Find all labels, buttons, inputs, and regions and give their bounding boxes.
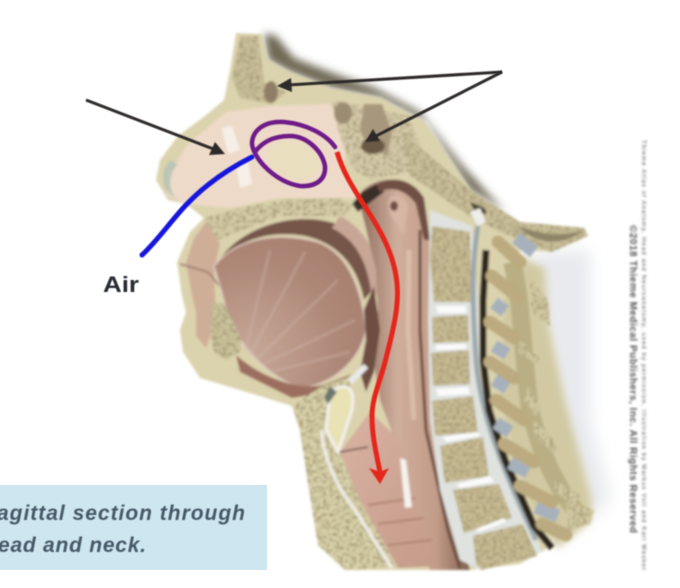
- roof of mouth dark band: [218, 219, 376, 300]
- skull shadow: [264, 33, 520, 222]
- nose cartilage: [163, 160, 178, 198]
- conchae highlight: [263, 134, 325, 186]
- nasal cavity: [162, 104, 360, 208]
- floor of mouth muscle: [236, 355, 352, 398]
- tongue: [214, 237, 366, 388]
- purple path: airflow loop in nasal cavity: [252, 122, 335, 186]
- posterior tissue: [490, 240, 592, 548]
- mandible: [210, 302, 241, 360]
- arrow: nasal cavity pointer: [86, 100, 225, 155]
- caption box: [0, 485, 267, 570]
- sinus pocket lower: [360, 104, 392, 154]
- anatomical illustration: [156, 33, 610, 570]
- blue path: inhaled air: [142, 157, 252, 255]
- back of neck haze: [530, 250, 610, 520]
- vertical copyright credit: ©2018 Thieme Medical Publishers, Inc. All Rights Reserved: [627, 225, 638, 533]
- vertical copyright credit: Thieme Atlas of Anatomy, Head and Neuroanatomy, used by permission, illustration by Markus Voll and Karl Wesker: [640, 140, 646, 570]
- vertebrae: [430, 226, 537, 570]
- caption text: [0, 502, 245, 557]
- sphenoid bone area: [332, 100, 425, 180]
- frontal bone: [232, 36, 286, 104]
- white cartilage strip: [400, 458, 412, 508]
- interspinous blue ligaments: [494, 238, 558, 516]
- dark epidural strip: [483, 250, 552, 548]
- soft palate: [332, 216, 382, 298]
- notch of foramen magnum: [470, 208, 486, 226]
- arrow: sphenoid sinus pointer: [365, 72, 502, 142]
- hyoid and thyroid cartilage: [326, 387, 353, 452]
- caption text: ead and neck.: [0, 534, 146, 557]
- intervertebral discs: [436, 306, 506, 532]
- posterior column: [512, 262, 582, 518]
- posterior pharyngeal wall stripes: [420, 230, 460, 568]
- vertebral column background: [428, 210, 542, 570]
- face tissue and lips: [186, 222, 220, 348]
- mouth line: [180, 264, 228, 296]
- posterior tips of spine: [518, 280, 594, 530]
- darker oropharynx by epiglottis: [360, 286, 380, 392]
- nasal septum highlight: [222, 126, 252, 188]
- white fascia stripe: [322, 430, 392, 568]
- spinal canal: [473, 226, 536, 540]
- caption text: agittal section through: [0, 502, 245, 525]
- neck front soft tissue: [292, 376, 395, 570]
- red path: air to trachea with arrow: [337, 152, 397, 484]
- sinus pocket upper: [334, 102, 352, 124]
- pharynx recess dark: [352, 184, 384, 212]
- trachea rings: [368, 498, 432, 545]
- pharynx: [358, 179, 470, 570]
- spinous processes: [490, 242, 566, 535]
- arrow: frontal sinus pointer: [277, 72, 502, 92]
- vocal fold line: [340, 447, 368, 452]
- label: Air: Air: [103, 272, 140, 297]
- palate: [204, 198, 352, 244]
- vertical copyright credit: [627, 140, 646, 570]
- occipital shadow: [518, 226, 584, 242]
- frontal sinus cavity: [264, 81, 278, 103]
- larynx and trachea: [340, 412, 440, 568]
- skull base bone: [400, 130, 588, 252]
- head silhouette: [156, 33, 588, 570]
